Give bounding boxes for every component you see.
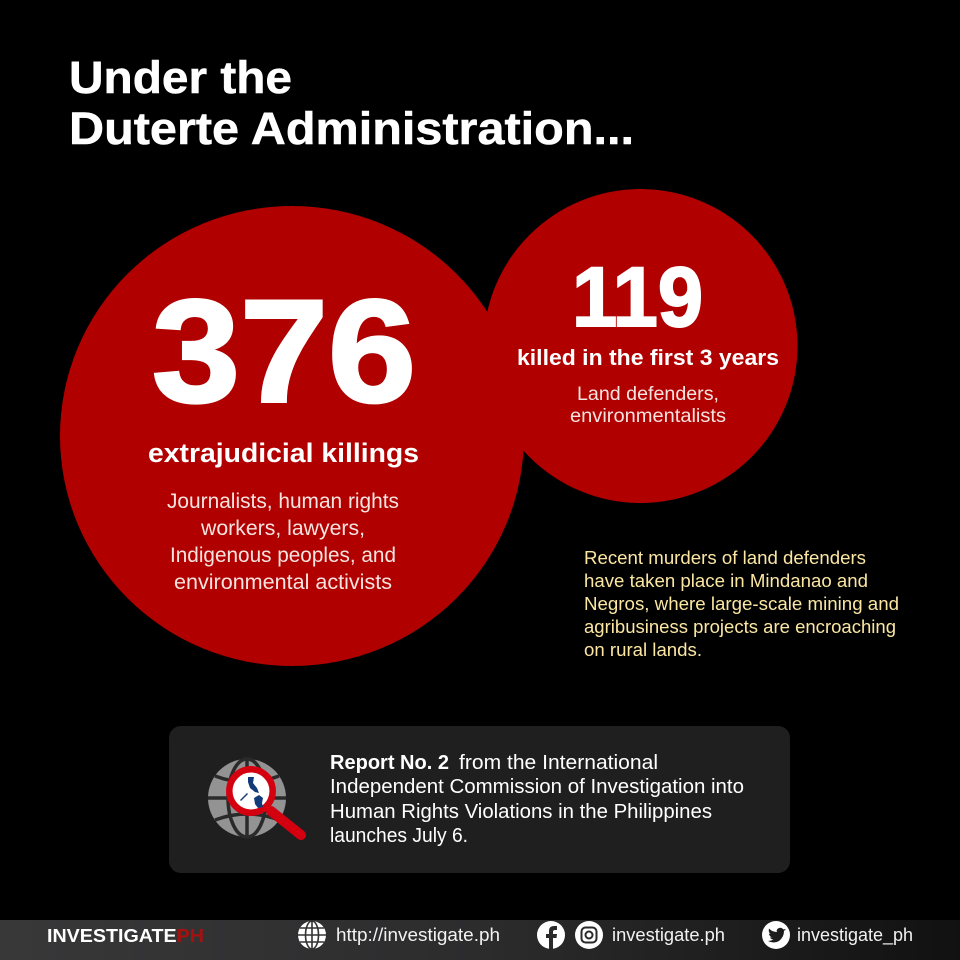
icon: instagram: [575, 921, 603, 949]
text: recent murders note: have taken place in Mindanao and: [584, 570, 868, 591]
text: report description: from the International: [459, 752, 658, 774]
text: recent murders note: agribusiness projects are encroaching: [584, 616, 896, 637]
text: twitter handle: investigate_ph: [797, 924, 913, 946]
icon: twitter: [762, 921, 790, 949]
text: report description: [330, 752, 744, 847]
icon: globe with magnifier: [208, 759, 301, 837]
title: Duterte Administration...: [69, 103, 634, 154]
text: report description: Independent Commission of Investigation into: [330, 776, 744, 798]
panel: 376 extrajudicial killings: [60, 206, 524, 666]
number: 376: 376: [152, 270, 416, 432]
title: Under the: [69, 52, 292, 103]
text: victims list: Journalists, human rights: [167, 490, 399, 513]
panel: 119 killed: [484, 189, 798, 503]
text: recent murders note: Recent murders of land defenders: [584, 547, 866, 568]
logo: INVESTIGATEPH: INVESTIGATE PH: [47, 926, 204, 946]
text: report description: Human Rights Violations in the Philippines: [330, 801, 712, 823]
heading: extrajudicial killings: extrajudicial killings: [148, 438, 419, 468]
icon: facebook: [537, 921, 565, 949]
icon: website globe: [298, 921, 326, 949]
text: victims list: Indigenous peoples, and: [170, 544, 396, 567]
title: [69, 52, 634, 154]
heading: killed in the first 3 years: killed in the first 3 years: [517, 345, 779, 370]
text: victims list: workers, lawyers,: [200, 517, 365, 540]
text: social handle: investigate.ph: [612, 924, 725, 945]
panel: report callout: [169, 726, 790, 873]
text: recent murders note: Negros, where large-scale mining and: [584, 593, 899, 614]
text: recent murders note: on rural lands.: [584, 639, 702, 660]
text: report description: Report No. 2: [330, 752, 449, 774]
text: report description: launches July 6.: [330, 825, 468, 847]
text: website: http://investigate.ph: [336, 924, 500, 945]
text: victims list: [167, 490, 399, 594]
text: land defenders: environmentalists: [570, 405, 726, 427]
text: land defenders: [570, 383, 726, 427]
text: land defenders: Land defenders,: [577, 383, 719, 405]
text: victims list: environmental activists: [174, 571, 392, 594]
number: 119: 119: [572, 250, 703, 344]
footer bar: [0, 920, 960, 960]
text: recent murders note: [584, 547, 899, 660]
